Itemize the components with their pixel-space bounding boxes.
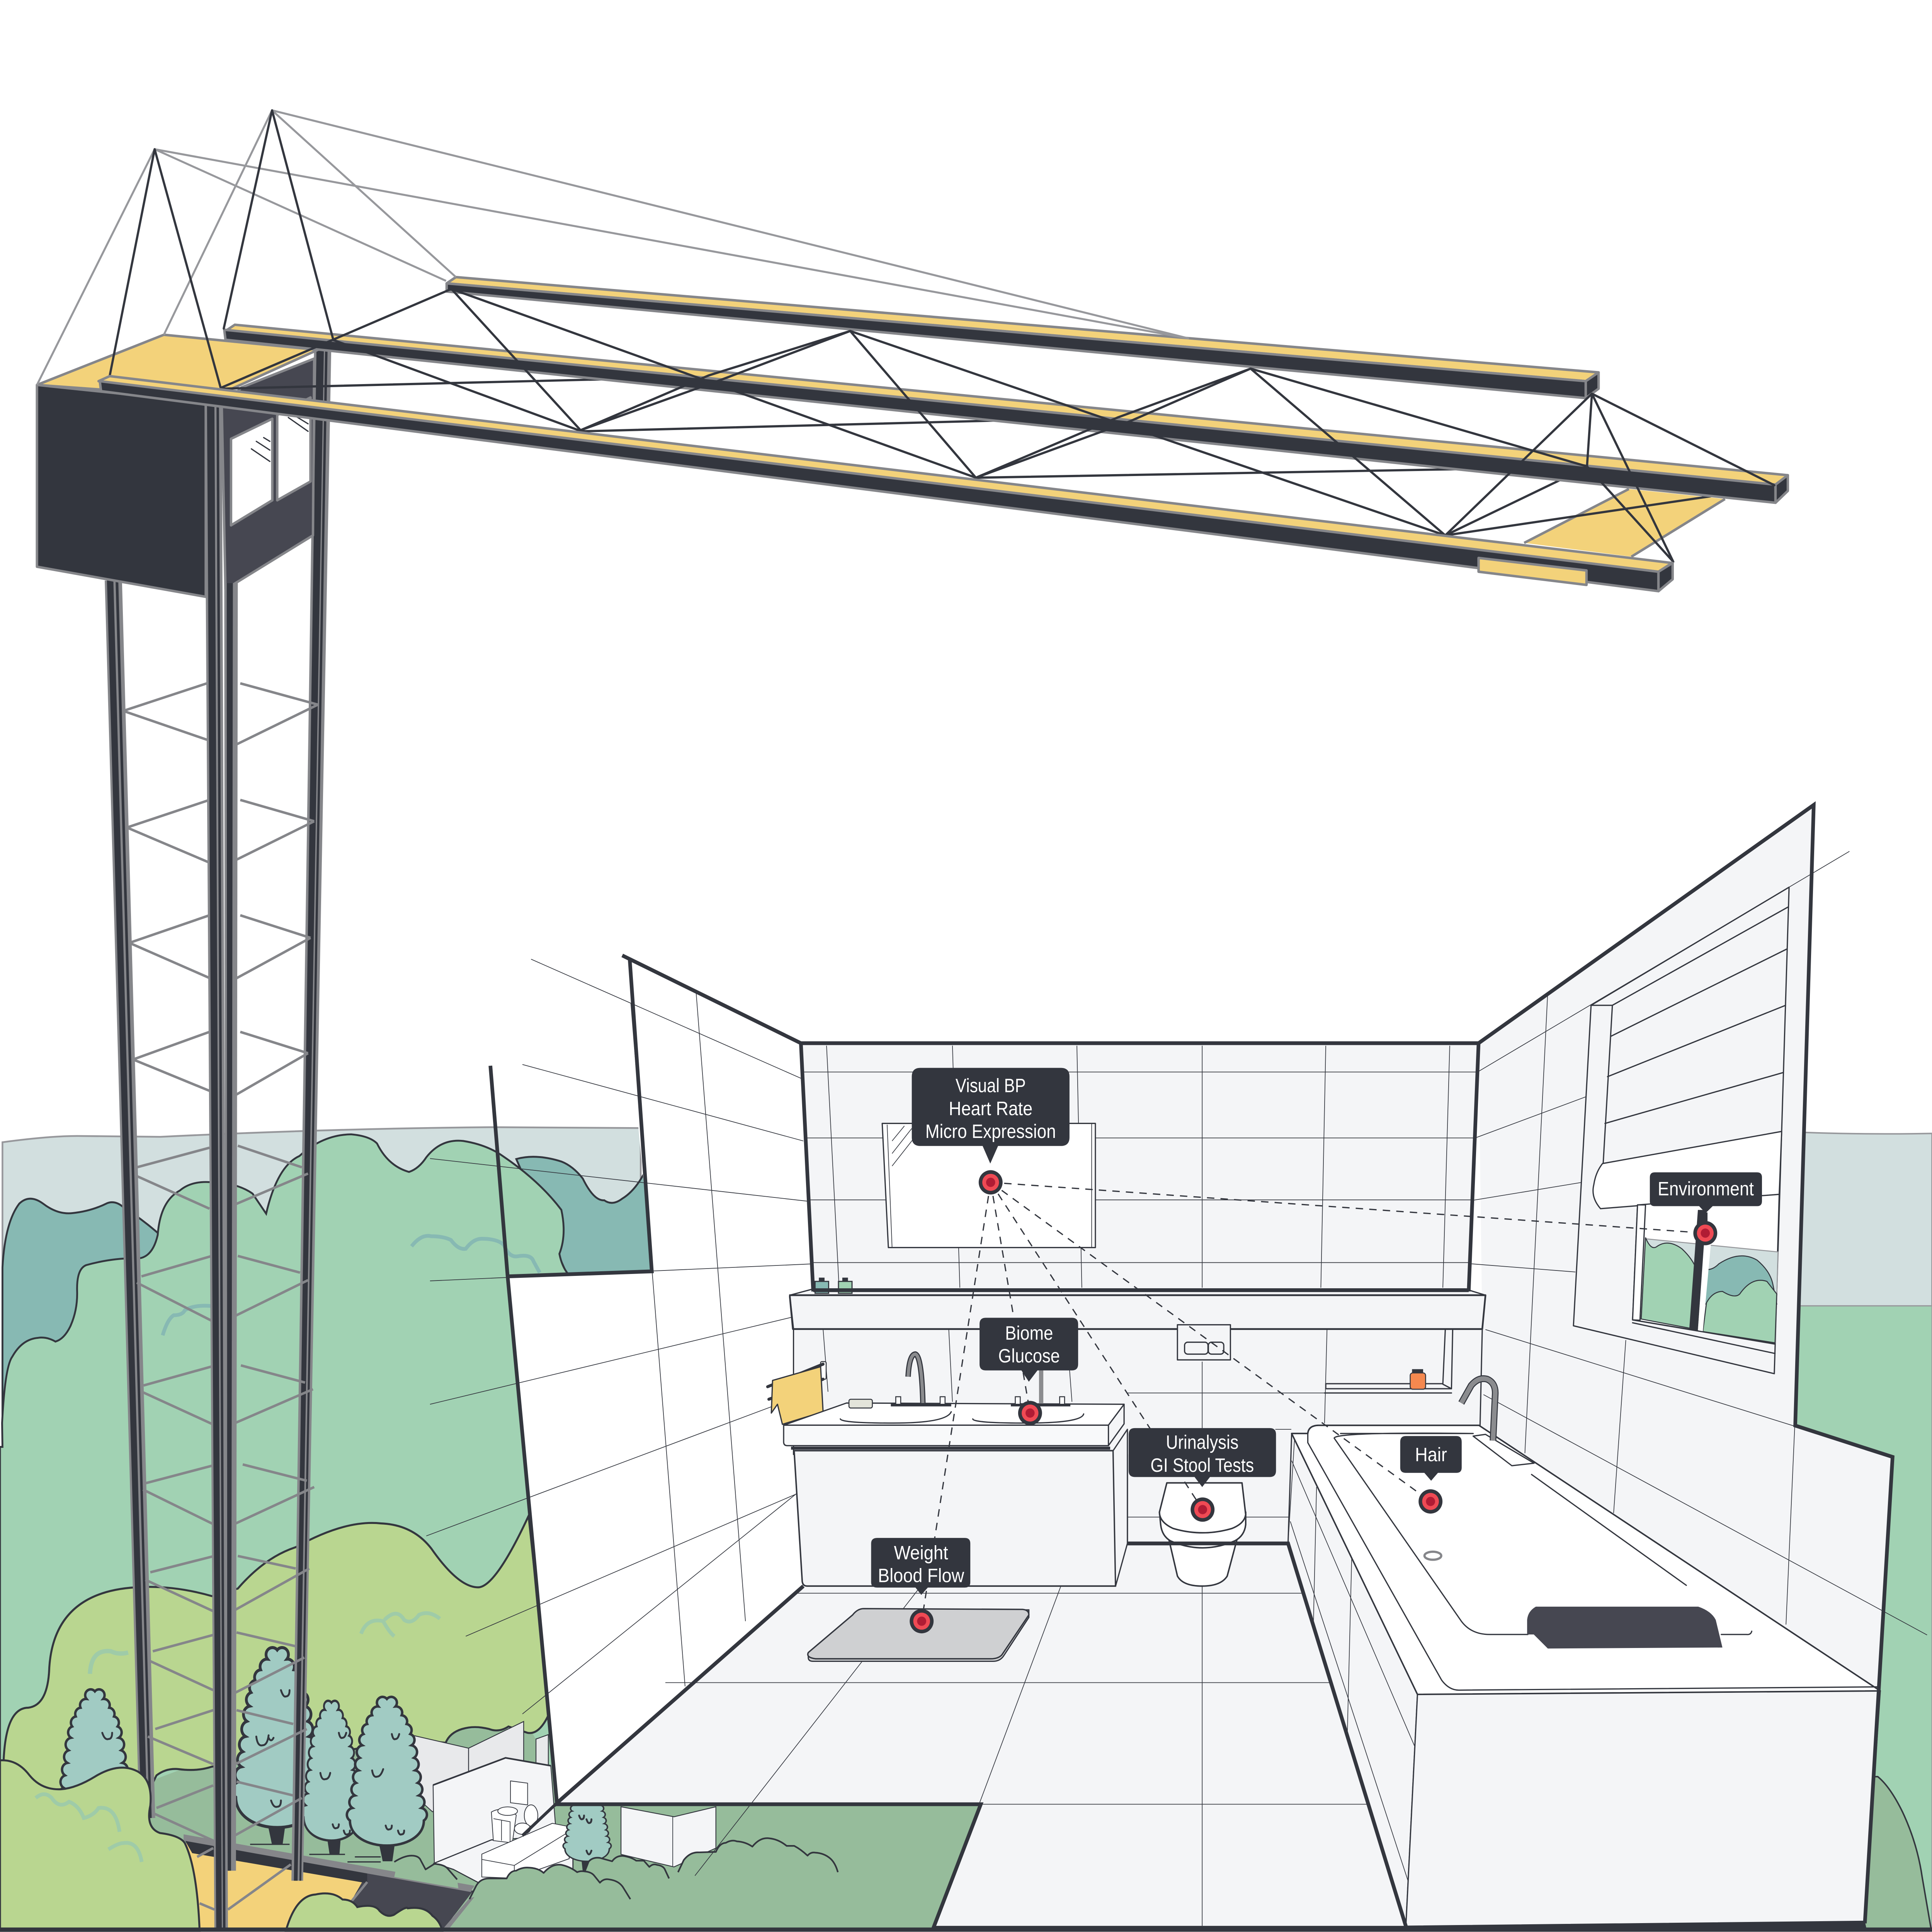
green bottle	[838, 1278, 852, 1293]
vanity counter	[784, 1403, 1124, 1446]
marker: urinalysis	[1190, 1497, 1214, 1522]
window sky	[1641, 1239, 1778, 1343]
left leg	[105, 580, 155, 1818]
teal bottle	[815, 1278, 828, 1293]
front strut	[204, 404, 228, 1931]
scene ground line	[0, 1929, 1932, 1930]
soap bar	[849, 1399, 872, 1408]
left tap	[891, 1354, 951, 1405]
green bush outlines	[469, 1838, 838, 1899]
mini front wall	[433, 1758, 557, 1863]
tree 3 trunk	[309, 1838, 345, 1854]
callout: environment: Environment	[1658, 1178, 1754, 1199]
marker: biome	[1018, 1401, 1042, 1425]
base front edge	[350, 1882, 367, 1903]
marker: hair	[1418, 1489, 1442, 1514]
window opening	[1633, 1194, 1779, 1344]
base grey strip	[441, 1897, 474, 1931]
mini bath	[482, 1823, 569, 1878]
left wall grid lines	[426, 959, 813, 1714]
mini bath rim	[482, 1833, 567, 1878]
shelf edge	[790, 1295, 1485, 1329]
trees	[56, 1648, 611, 1872]
base yellow floor	[185, 1843, 367, 1931]
bath side panel	[1288, 1434, 1417, 1926]
left wall	[508, 956, 816, 1803]
toilet	[1160, 1483, 1246, 1586]
window view	[1641, 1238, 1778, 1343]
right tap	[1011, 1367, 1070, 1405]
callout: biome: Biome	[1005, 1322, 1053, 1344]
marker: visual	[979, 1170, 1003, 1194]
hill squiggle teal	[412, 1236, 540, 1273]
mini wall top edge	[433, 1758, 551, 1785]
lime bush left	[0, 1760, 200, 1931]
truss lines behind middle beam	[222, 377, 1718, 536]
back wall	[801, 1043, 1479, 1291]
rear strut	[224, 583, 238, 1871]
sensor connection lines	[922, 1182, 1705, 1621]
bush squiggle lower	[109, 1843, 142, 1862]
truss lines	[222, 287, 1774, 562]
tree 2 trunk	[250, 1826, 289, 1844]
crane cab	[37, 335, 318, 597]
crane base	[184, 1834, 474, 1931]
middle beam	[224, 325, 1788, 503]
callout: hair	[1400, 1436, 1462, 1481]
base grey rim	[184, 1834, 474, 1892]
orange bottle	[1410, 1369, 1425, 1389]
bath tap	[1461, 1379, 1495, 1440]
callout: environment	[1650, 1172, 1762, 1223]
floor green ground	[136, 1728, 986, 1931]
lime bush small	[286, 1893, 442, 1931]
bath mat	[808, 1609, 1029, 1661]
window left frame	[1633, 1205, 1646, 1320]
sky band left	[2, 1127, 641, 1379]
sky band right	[1799, 1132, 1932, 1306]
cab window right	[277, 398, 311, 500]
callout: visual: Visual BP	[956, 1075, 1026, 1096]
counterweight plate	[1479, 558, 1587, 585]
window recess	[1573, 887, 1789, 1374]
mini back wall right	[469, 1721, 524, 1796]
back wall grid	[803, 1046, 1476, 1287]
callout: urinalysis: Urinalysis	[1166, 1431, 1238, 1453]
mini block right	[621, 1807, 716, 1867]
callout: weight: Blood Flow	[878, 1565, 964, 1587]
base dark beam	[184, 1838, 367, 1883]
window glare	[252, 416, 308, 461]
grey suspension cables	[37, 111, 1189, 385]
bath front	[1406, 1691, 1880, 1926]
bath top rim	[1292, 1425, 1880, 1694]
callout: biome	[980, 1318, 1078, 1382]
callout: biome: Glucose	[998, 1345, 1060, 1367]
mini mirror	[510, 1781, 527, 1805]
miniature bathroom building	[412, 1721, 716, 1887]
roller blind slats	[1591, 907, 1788, 1209]
tree 4 trunk	[347, 1843, 394, 1862]
tree 3	[301, 1701, 361, 1840]
bath rim line and basin	[1308, 1433, 1878, 1690]
right corner bush	[1848, 1777, 1931, 1931]
mini vanity	[492, 1807, 517, 1843]
green shrub outline	[394, 1855, 457, 1879]
towel rail	[768, 1362, 826, 1424]
mini far wall	[536, 1735, 548, 1770]
flush plate	[1177, 1325, 1230, 1360]
lime hill squiggle	[361, 1613, 440, 1636]
dark mast struts	[110, 111, 333, 388]
tree 2	[232, 1648, 322, 1828]
tree small	[563, 1787, 611, 1872]
hill squiggle near tower	[163, 1306, 216, 1335]
callout: urinalysis	[1129, 1428, 1276, 1487]
callout: weight: Weight	[894, 1542, 948, 1563]
front beam	[99, 376, 1673, 591]
right green field	[1787, 1306, 1932, 1931]
bath panel grid	[1288, 1438, 1415, 1880]
callout: weight	[871, 1538, 970, 1595]
callout: visual	[912, 1068, 1070, 1163]
bush squiggle upper	[36, 1794, 119, 1832]
tree 1	[56, 1689, 134, 1838]
bathroom	[0, 805, 1932, 1930]
right leg	[291, 338, 332, 1881]
cab dark front	[37, 385, 206, 597]
teal back hill left	[2, 1199, 160, 1454]
roller blind	[1593, 1131, 1782, 1209]
base purple pit	[350, 1873, 473, 1931]
tower middle leg	[204, 404, 238, 1931]
floor bottom band	[933, 1921, 1867, 1930]
cab window left	[231, 419, 272, 526]
cab side face	[222, 359, 314, 589]
crane tower	[105, 338, 332, 1910]
cab yellow roof	[37, 335, 318, 391]
niche shelf	[1325, 1329, 1453, 1393]
platform edges	[1524, 489, 1725, 557]
window teal hill	[1690, 1256, 1777, 1304]
teal back hill right	[516, 1157, 652, 1274]
mini toilet	[514, 1805, 538, 1834]
mini diagonal wall edge	[522, 1803, 557, 1835]
shelf and lower wall	[790, 1289, 1485, 1545]
lime hill squiggle left	[90, 1651, 128, 1674]
marker: weight	[910, 1609, 934, 1633]
bath pillow	[1527, 1607, 1723, 1648]
marker: environment	[1693, 1221, 1717, 1245]
floor grid	[557, 1586, 1367, 1926]
window mullion dark	[1689, 1210, 1706, 1330]
tap plate	[1473, 1434, 1534, 1466]
main green hill	[0, 1134, 579, 1818]
background landscape	[0, 1127, 1932, 1931]
tree 4	[347, 1697, 427, 1845]
lime hill	[0, 1516, 549, 1793]
right wall grid	[1470, 851, 1927, 1635]
mirror	[882, 1123, 1095, 1248]
green bush fill	[449, 1838, 939, 1931]
window right hill	[1703, 1280, 1777, 1343]
crane jib	[37, 111, 1788, 591]
plug ring	[1425, 1552, 1441, 1560]
window left hill	[1641, 1238, 1698, 1329]
callout: visual: Micro Expression	[925, 1121, 1056, 1142]
tower cross braces	[123, 683, 318, 1910]
far platform	[1524, 489, 1725, 557]
floor	[557, 1543, 1405, 1927]
green shrub behind mini bath fill	[394, 1855, 458, 1888]
thick room outlines	[490, 805, 1893, 1929]
vanity cabinet	[791, 1429, 1128, 1586]
callout: hair: Hair	[1415, 1444, 1447, 1466]
rear beam	[447, 277, 1599, 398]
callout: urinalysis: GI Stool Tests	[1150, 1454, 1254, 1476]
window mullion white	[1698, 1206, 1714, 1332]
lower wall grid	[823, 1329, 1327, 1517]
foreground bushes	[0, 1760, 939, 1931]
mini floor	[434, 1840, 573, 1887]
callout: visual: Heart Rate	[949, 1098, 1032, 1119]
right wall	[1290, 805, 1891, 1923]
window sill	[1633, 1320, 1775, 1354]
mini back wall left	[412, 1735, 469, 1812]
